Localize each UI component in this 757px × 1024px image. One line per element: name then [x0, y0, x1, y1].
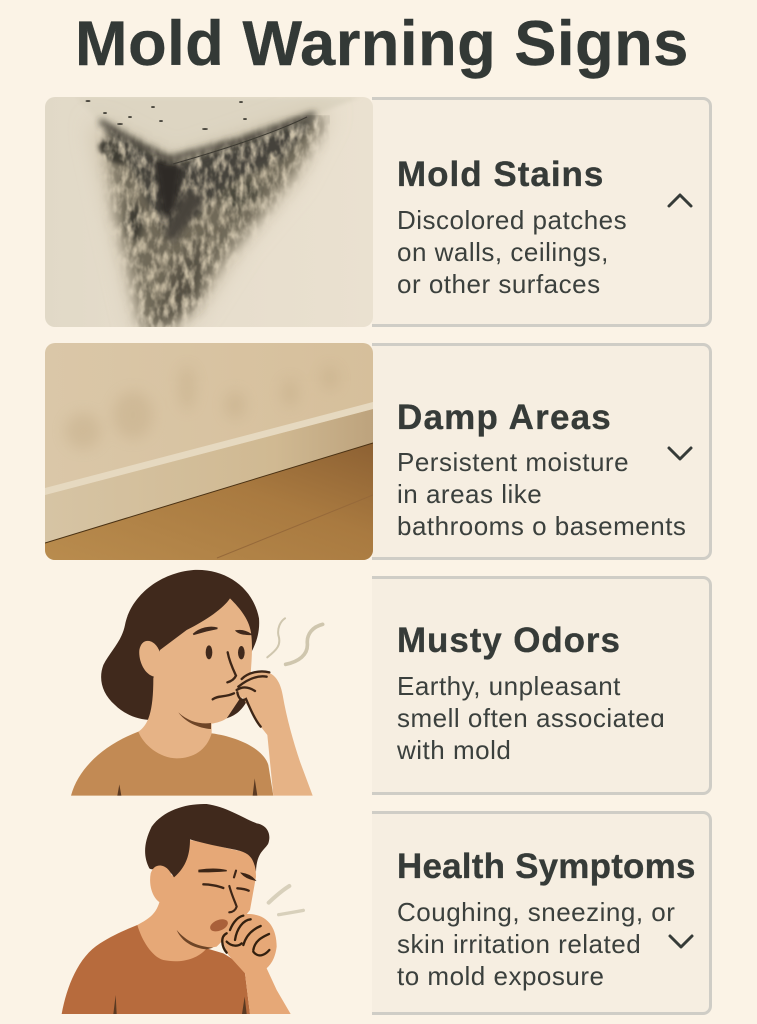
text: health symptoms description: skin irritation related — [397, 929, 641, 959]
text: health symptoms description: Coughing, sneezing, or — [397, 897, 675, 927]
fingers — [237, 671, 269, 727]
arm and hand — [237, 671, 313, 796]
text: mold stains description: on walls, ceilings, — [397, 237, 609, 267]
eyebrows, eyes, nose — [199, 869, 255, 880]
text: musty odors description: smell often associateɑ — [397, 703, 665, 733]
text: mold stains description: or other surfaces — [397, 269, 601, 299]
text: health symptoms description — [397, 897, 675, 991]
heading: damp areas: Damp Areas — [397, 398, 612, 437]
panel: health symptoms text card — [372, 811, 712, 1015]
smell lines — [267, 618, 285, 657]
panel: mold stains text card — [372, 97, 712, 327]
soft halo — [93, 109, 330, 329]
text: mold stains description: Discolored patches — [397, 205, 627, 235]
text: damp areas description: Persistent moisture — [397, 447, 629, 477]
fingers — [222, 916, 269, 955]
icon: chevron up — [667, 193, 693, 208]
mouth — [208, 917, 230, 934]
heading: musty odors: Musty Odors — [397, 621, 621, 660]
heading: health symptoms: Health Symptoms — [397, 847, 696, 886]
text: mold stains description — [397, 205, 627, 299]
photo: damp wall and baseboard — [45, 343, 373, 560]
photo: mold stain on wall corner — [45, 97, 373, 327]
text: health symptoms description: to mold exposure — [397, 961, 604, 991]
panel: musty odors text card — [372, 576, 712, 795]
ear — [150, 865, 173, 903]
title: Mold Warning Signs — [75, 9, 689, 79]
jaw shadow — [177, 930, 213, 949]
cough lines — [269, 886, 289, 903]
text: damp areas description: in areas like — [397, 479, 542, 509]
hair — [145, 804, 269, 877]
icon: chevron down — [667, 446, 693, 461]
eyebrows, eyes, nose, mouth — [193, 627, 251, 634]
illustration: man coughing — [62, 804, 305, 1014]
ear — [139, 641, 160, 677]
shirt — [71, 732, 273, 796]
heading: mold stains: Mold Stains — [397, 155, 604, 194]
baseboard — [149, 409, 373, 509]
jaw shadow — [178, 712, 211, 729]
neck and face — [138, 598, 252, 758]
forearm and fist — [223, 914, 291, 1014]
text: musty odors description: with mold — [397, 735, 511, 765]
text: damp areas description — [397, 447, 686, 541]
icon: chevron down — [668, 934, 694, 949]
illustration: woman covering nose — [71, 570, 324, 796]
hair — [101, 570, 259, 720]
panel: damp areas text card — [372, 343, 712, 560]
shirt — [62, 925, 250, 1014]
ceiling wedge — [120, 98, 350, 148]
neck and head — [137, 840, 256, 961]
text: damp areas description: bathrooms o basements — [397, 511, 686, 541]
text: musty odors description — [397, 671, 665, 765]
text: musty odors description: Earthy, unpleasant — [397, 671, 621, 701]
